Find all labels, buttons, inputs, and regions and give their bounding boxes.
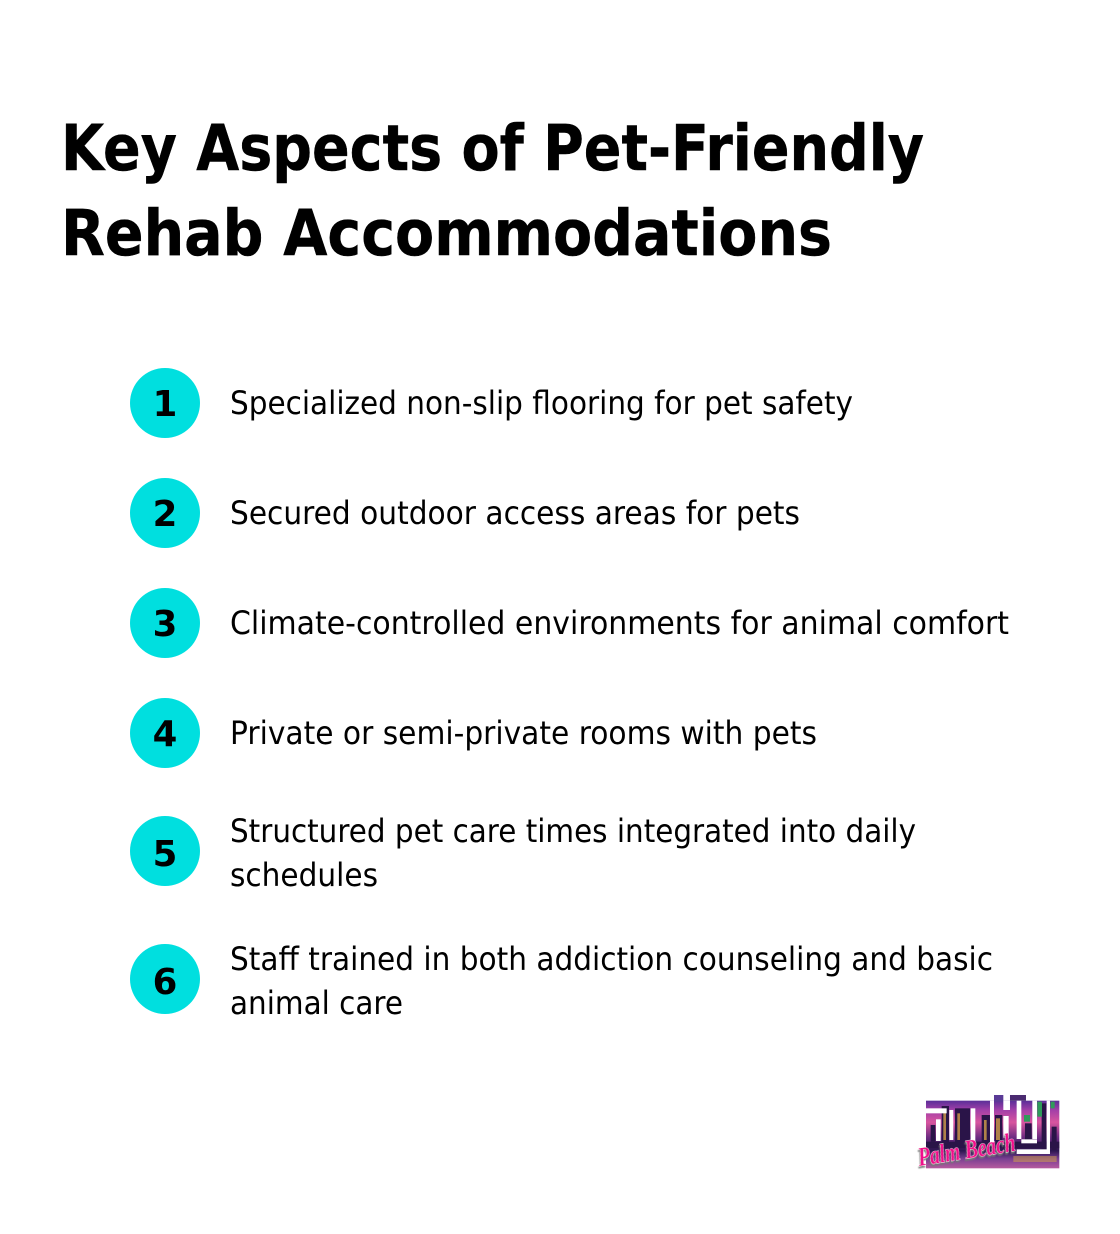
- number badge 6: [130, 944, 200, 1014]
- item 6 text: [230, 940, 993, 1022]
- number badge 4: 4: [153, 714, 177, 755]
- logo script: Palm Beach: Palm Beach: [915, 1128, 1017, 1172]
- number badge 4: [130, 698, 200, 768]
- title: Key Aspects of Pet-Friendly: [61, 111, 924, 185]
- item 5 text: schedules: [230, 856, 378, 894]
- number badge 3: [130, 588, 200, 658]
- list item 5: [130, 812, 916, 894]
- number badge 5: [130, 816, 200, 886]
- list item 3: [130, 588, 1009, 658]
- list item 4: [130, 698, 817, 768]
- title: Rehab Accommodations: [61, 196, 832, 270]
- item 4 text: Private or semi-private rooms with pets: [230, 714, 817, 752]
- number badge 5: 5: [153, 834, 177, 875]
- number badge 6: 6: [153, 962, 177, 1003]
- logo: Amity Palm Beach: [915, 1095, 1059, 1172]
- white letter cuts: [926, 1101, 1050, 1154]
- number badge 2: [130, 478, 200, 548]
- number badge 1: 1: [153, 384, 177, 425]
- list item 6: [130, 940, 993, 1022]
- list item 1: [130, 368, 853, 438]
- number badge 2: 2: [153, 494, 177, 535]
- city buildings: [926, 1103, 1059, 1153]
- item 3 text: Climate-controlled environments for animal comfort: [230, 604, 1009, 642]
- item 5 text: Structured pet care times integrated into daily: [230, 812, 916, 850]
- number badge 3: 3: [153, 604, 177, 645]
- item 6 text: animal care: [230, 984, 403, 1022]
- title: [61, 111, 924, 270]
- item 1 text: Specialized non-slip flooring for pet safety: [230, 384, 853, 422]
- number badge 1: [130, 368, 200, 438]
- item 6 text: Staff trained in both addiction counseling and basic: [230, 940, 993, 978]
- item 2 text: Secured outdoor access areas for pets: [230, 494, 800, 532]
- item 5 text: [230, 812, 916, 894]
- list item 2: [130, 478, 800, 548]
